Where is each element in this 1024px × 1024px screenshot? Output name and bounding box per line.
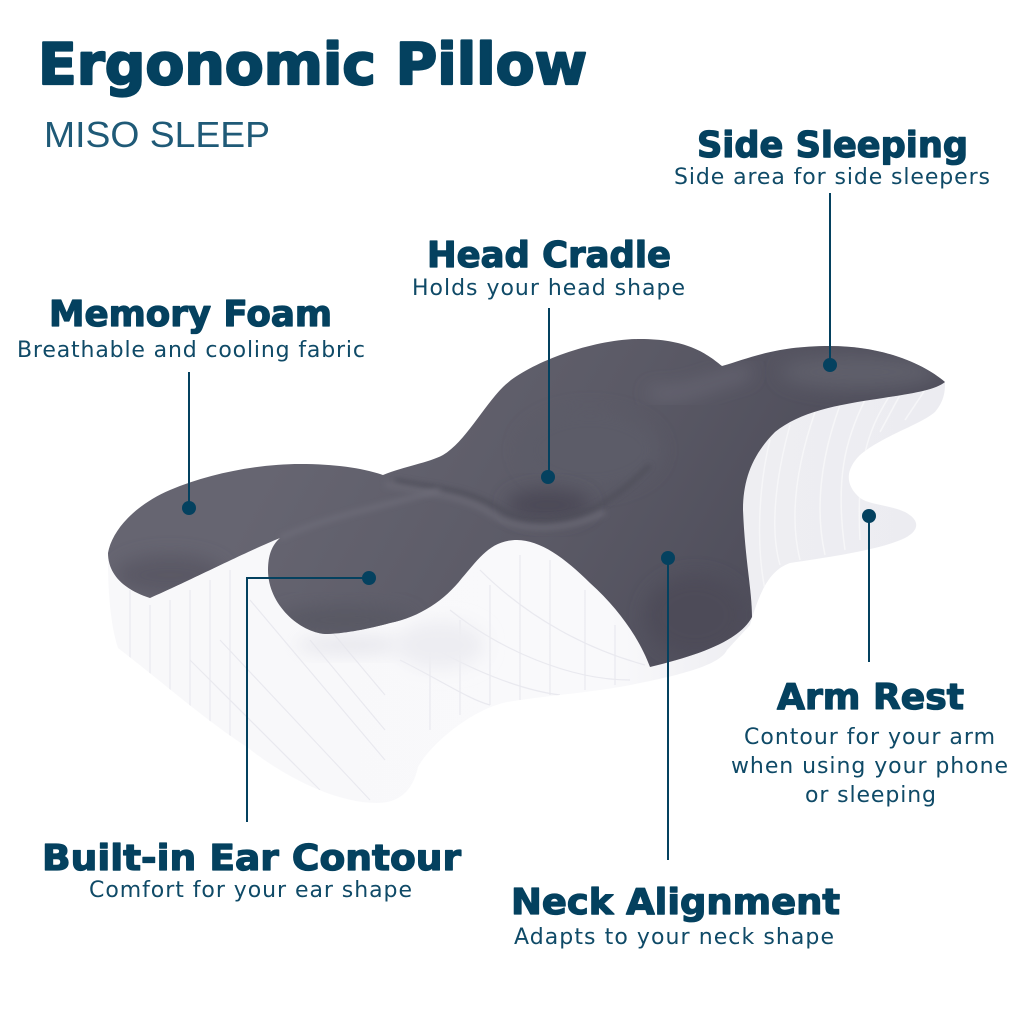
callout: side sleeping <box>674 125 990 372</box>
leader line: built-in ear contour <box>247 578 369 822</box>
marker: neck alignment <box>661 551 675 565</box>
heading: neck alignment: Neck Alignment <box>511 882 840 923</box>
leader line: memory foam <box>188 372 190 508</box>
description: memory foam: Breathable and cooling fabric <box>17 338 365 363</box>
heading: side sleeping: Side Sleeping <box>697 125 968 166</box>
description: neck alignment: Adapts to your neck shape <box>514 925 834 950</box>
description: head cradle: Holds your head shape <box>412 276 685 301</box>
description: arm rest <box>731 725 1008 808</box>
callout: built-in ear contour <box>42 571 461 903</box>
title: Ergonomic Pillow <box>38 32 587 98</box>
marker: built-in ear contour <box>362 571 376 585</box>
subtitle: MISO SLEEP <box>44 114 270 155</box>
pillow white base <box>100 370 960 810</box>
marker: memory foam <box>182 501 196 515</box>
callout: arm rest <box>731 509 1008 808</box>
description: side sleeping: Side area for side sleepers <box>674 165 990 190</box>
heading: arm rest: Arm Rest <box>777 677 964 718</box>
description: built-in ear contour: Comfort for your ear shape <box>89 878 412 903</box>
leader line: side sleeping <box>829 193 831 365</box>
description: arm rest: or sleeping <box>805 783 936 808</box>
callout: memory foam <box>17 294 365 515</box>
marker: head cradle <box>541 470 555 484</box>
leader line: arm rest <box>868 516 870 662</box>
marker: side sleeping <box>823 358 837 372</box>
description: arm rest: Contour for your arm <box>744 725 995 750</box>
leader line: head cradle <box>548 308 550 477</box>
heading: memory foam: Memory Foam <box>49 294 332 335</box>
leader line: neck alignment <box>667 558 669 860</box>
heading: head cradle: Head Cradle <box>427 235 671 276</box>
heading: built-in ear contour: Built-in Ear Contour <box>42 838 461 879</box>
callout: neck alignment <box>511 551 840 950</box>
callout: head cradle <box>412 235 685 484</box>
pillow illustration <box>100 330 960 810</box>
pillow dark top surface <box>100 330 960 680</box>
description: arm rest: when using your phone <box>731 754 1008 779</box>
marker: arm rest <box>862 509 876 523</box>
